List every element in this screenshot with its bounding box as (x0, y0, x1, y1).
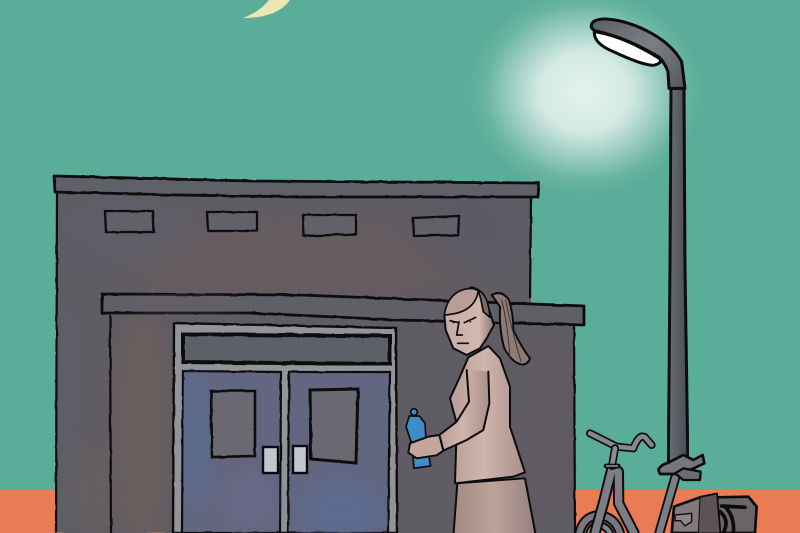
left door handle (263, 447, 278, 473)
upper wall (57, 190, 574, 533)
bottle cap (411, 409, 417, 415)
pannier buckle (675, 513, 692, 526)
roof (54, 176, 539, 197)
arm (439, 370, 489, 451)
door frame (173, 323, 397, 533)
lamp glow (467, 0, 703, 196)
jacket (450, 346, 525, 483)
arm outline (439, 370, 489, 451)
rear wheel (720, 506, 745, 533)
left door window (211, 391, 255, 457)
right eye (469, 321, 471, 322)
canopy (102, 294, 584, 325)
ground (0, 490, 800, 533)
pannier flap (698, 494, 720, 533)
lower wall colour variation (57, 320, 166, 533)
front wheel and mudguard (579, 515, 620, 533)
nose (457, 322, 462, 335)
hair side (478, 290, 490, 317)
clerestory windows (105, 211, 459, 236)
head shape (444, 287, 494, 355)
left door (182, 371, 281, 533)
pannier bag (672, 494, 720, 533)
bicycle (579, 433, 757, 533)
hair cap (444, 289, 478, 315)
transom window (183, 334, 390, 364)
moon (243, 0, 290, 18)
handlebar (590, 433, 652, 466)
right door handle (293, 446, 307, 473)
building (50, 176, 584, 533)
right door (288, 372, 390, 533)
water bottle (406, 409, 431, 468)
ponytail (492, 293, 530, 365)
bottle body (406, 416, 431, 468)
saddle (658, 455, 704, 474)
woman (406, 346, 536, 533)
right door window (310, 389, 358, 463)
right eyebrow (464, 317, 476, 323)
street lamp (591, 19, 688, 467)
wall colour variation (206, 249, 365, 271)
door colour variation (181, 370, 380, 533)
mouth (458, 341, 468, 346)
bicycle frame (595, 470, 675, 533)
left eye (452, 322, 454, 323)
building outlines (56, 192, 575, 533)
hand (408, 435, 443, 458)
lamp lens (594, 32, 660, 65)
skirt (453, 478, 536, 533)
rear rack and wheel (717, 497, 757, 533)
lamp pole (668, 88, 688, 467)
canopy colour variation (130, 299, 240, 311)
saddle springs (675, 468, 701, 480)
woman's head (444, 287, 530, 365)
lamp housing (591, 19, 685, 88)
left eyebrow (450, 321, 458, 323)
ponytail strands (502, 300, 521, 362)
